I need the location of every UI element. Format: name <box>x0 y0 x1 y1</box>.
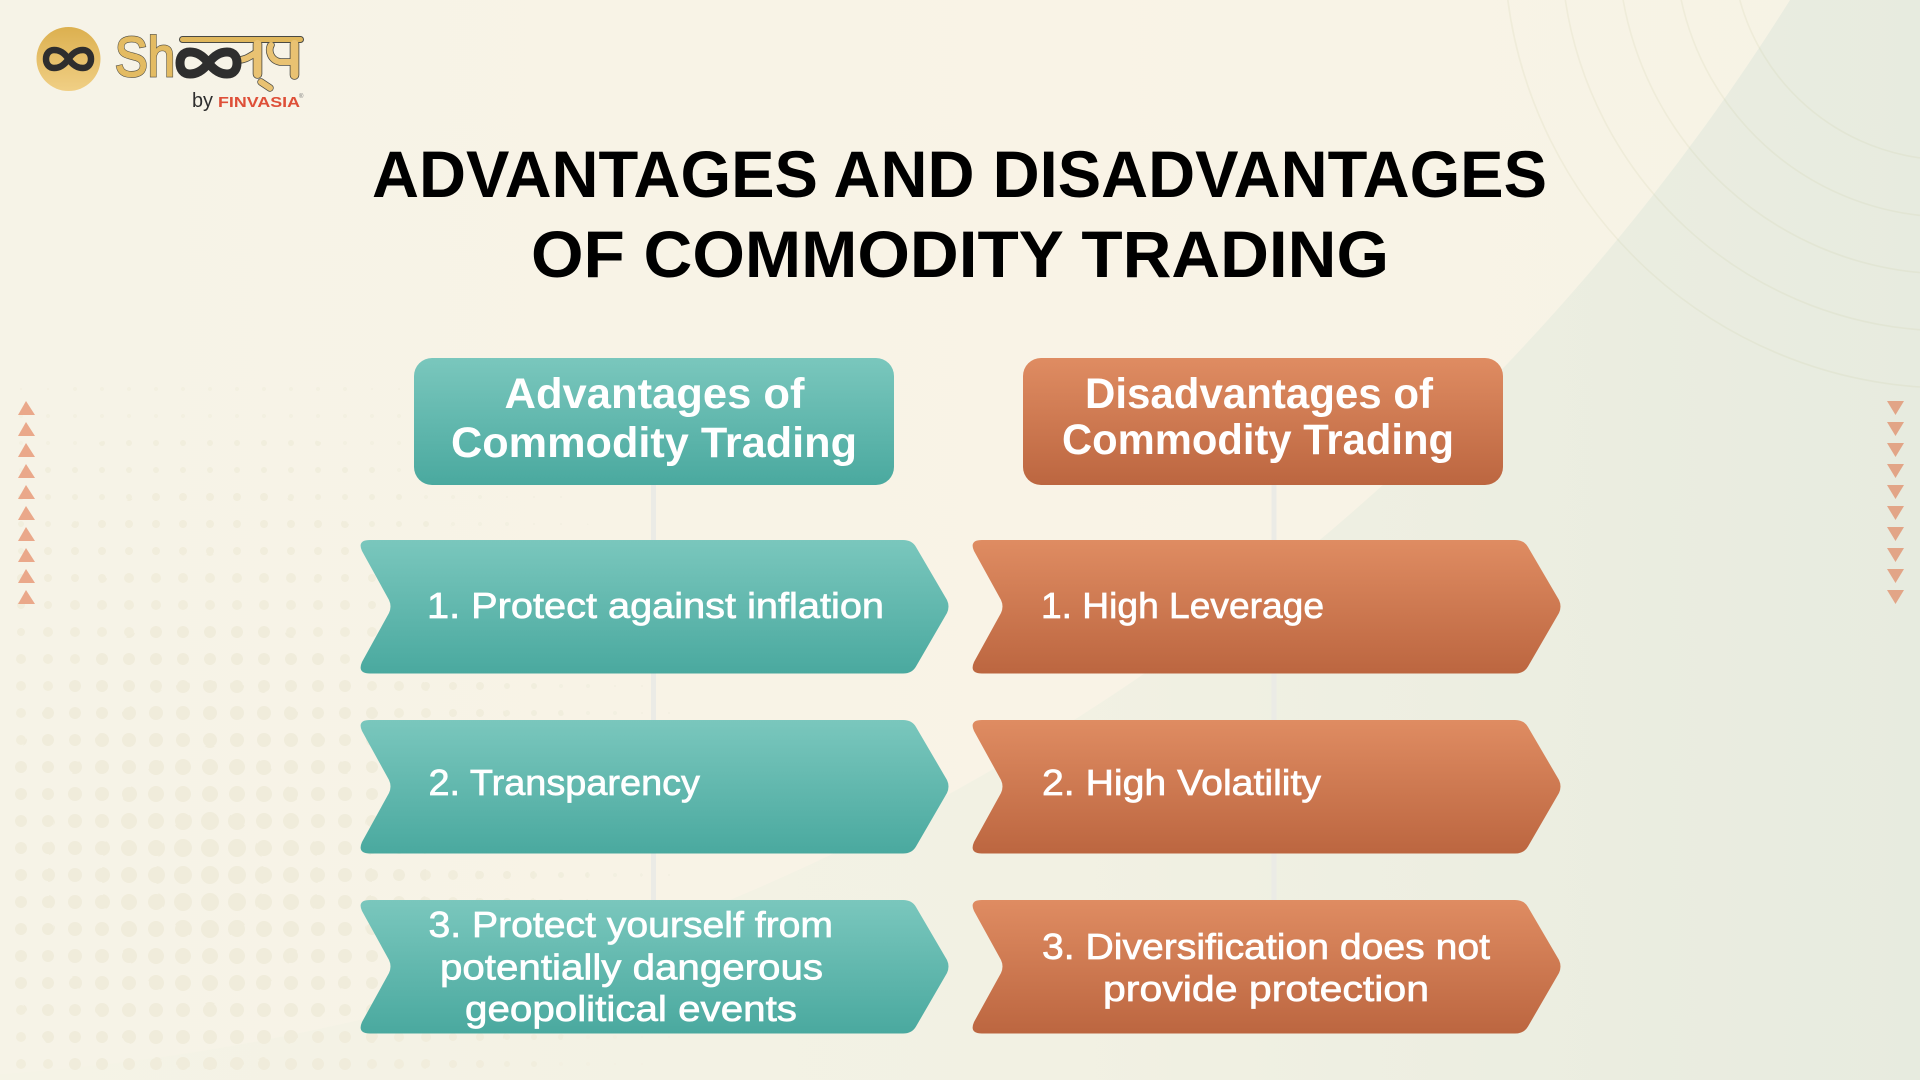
disadvantage 2 chevron: 2. High Volatility <box>1042 762 1321 803</box>
advantage 3 chevron: potentially dangerous <box>440 946 823 988</box>
logo byline <box>192 90 304 112</box>
logo wordmark: Sh <box>115 25 175 88</box>
logo byline: by <box>192 90 213 112</box>
background: concentric arcs top right <box>1508 0 1920 387</box>
advantages header: Advantages of <box>504 370 805 418</box>
disadvantage 3 chevron: 3. Diversification does not <box>1042 926 1490 967</box>
disadvantage 2 chevron <box>973 720 1560 854</box>
logo wordmark <box>115 25 304 88</box>
disadvantages header: Commodity Trading <box>1062 416 1454 464</box>
disadvantages header: Disadvantages of <box>1085 370 1434 418</box>
title: OF COMMODITY TRADING <box>531 217 1389 291</box>
disadvantage 3 chevron: provide protection <box>1103 968 1429 1009</box>
advantage 2 chevron <box>361 720 949 854</box>
logo wordmark: Sh <box>115 25 175 88</box>
logo byline: FINVASIA <box>218 94 300 111</box>
disadvantage 3 chevron <box>973 900 1560 1034</box>
advantage 1 chevron <box>361 540 949 674</box>
disadvantage 1 chevron: 1. High Leverage <box>1041 585 1324 626</box>
advantage 2 chevron: 2. Transparency <box>428 762 700 803</box>
panel: advantages column <box>361 358 949 1034</box>
logo byline: ® <box>299 93 304 100</box>
title: ADVANTAGES AND DISADVANTAGES <box>372 137 1547 211</box>
panel: disadvantages column <box>973 358 1560 1034</box>
advantages header <box>414 358 894 485</box>
advantage 3 chevron: geopolitical events <box>465 988 797 1029</box>
advantage 3 chevron <box>361 900 949 1034</box>
decorative downward triangles right <box>1887 401 1904 604</box>
disadvantages header <box>1023 358 1503 485</box>
title <box>372 137 1547 291</box>
logo: Shoonya by Finvasia <box>36 25 304 112</box>
background: halftone dot field bottom left <box>0 376 690 1078</box>
advantage 3 chevron: 3. Protect yourself from <box>428 904 833 945</box>
advantage 1 chevron: 1. Protect against inflation <box>427 585 884 626</box>
decorative upward triangles left <box>18 401 35 604</box>
disadvantage 1 chevron <box>973 540 1560 674</box>
advantages header: Commodity Trading <box>451 419 857 467</box>
logo icon: gold circle with infinity <box>36 27 100 91</box>
connector lines behind columns <box>651 485 1276 905</box>
